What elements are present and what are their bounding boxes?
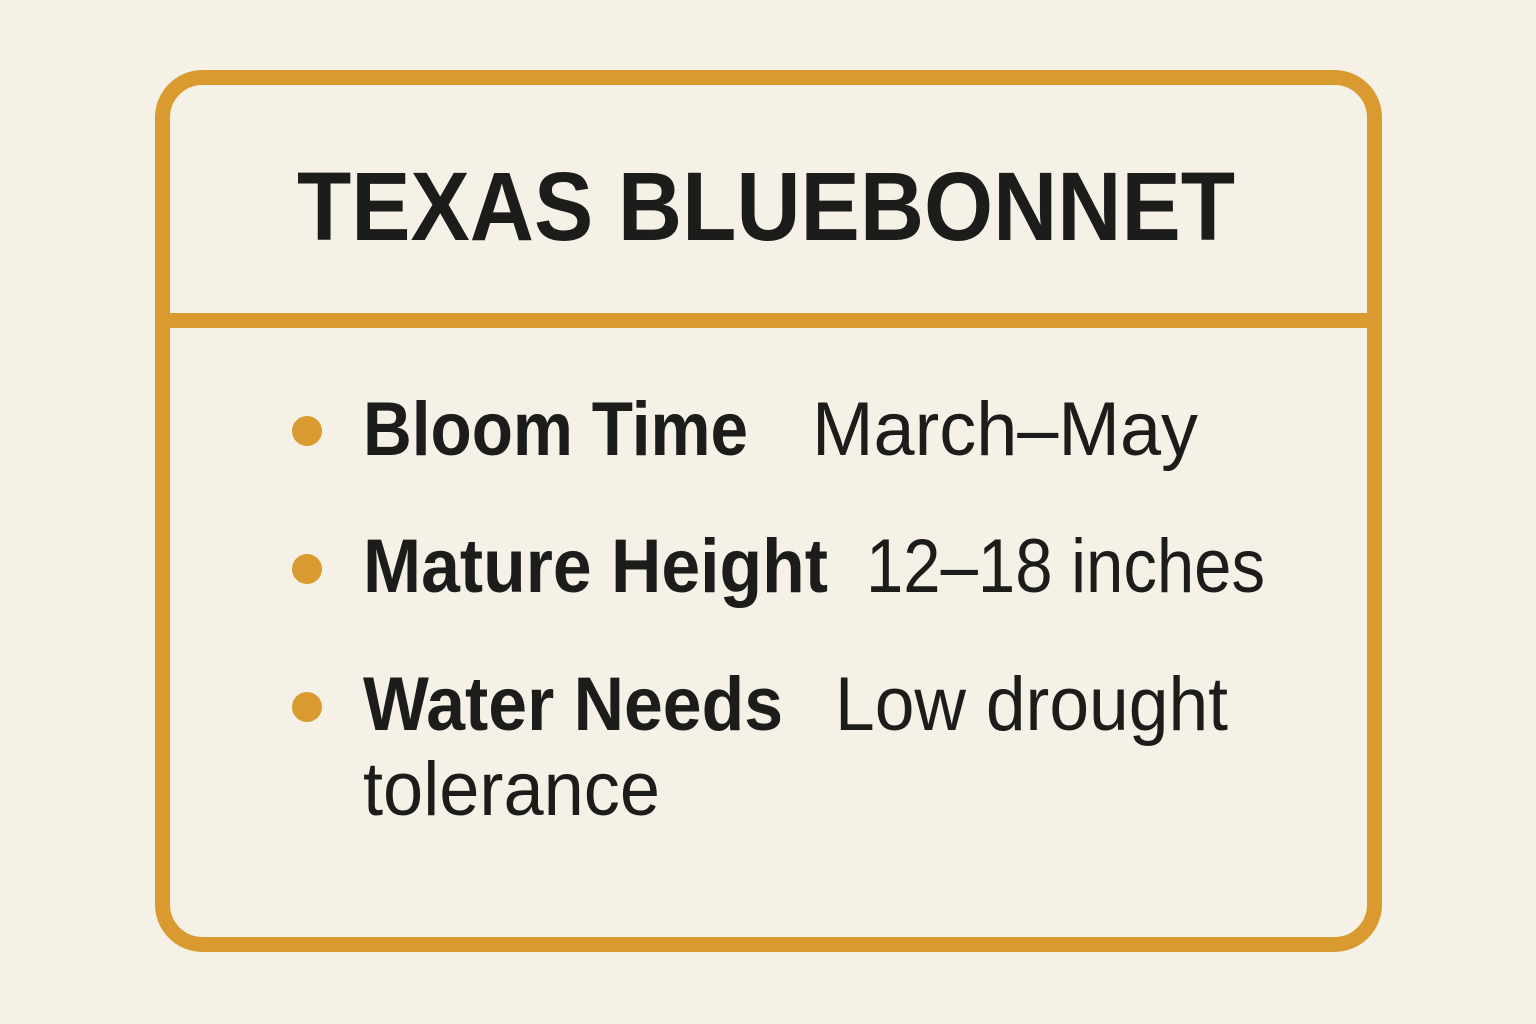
bullet: water needs: Low drought [835,662,1228,747]
bullet: mature height: Mature Height [363,524,828,609]
bullet: mature height [292,524,1265,609]
bullet: mature height: 12–18 inches [866,524,1265,609]
title: TEXAS BLUEBONNET [297,152,1235,261]
bullet: bloom time [292,387,1198,472]
bullet: water needs: Water Needs [363,662,783,747]
bullet: water needs [292,662,1228,832]
panel: info card [162,78,1375,944]
bullet: bloom time: Bloom Time [363,387,748,472]
bullet: bloom time: March–May [812,387,1198,472]
bullet: water needs: tolerance [363,747,660,832]
